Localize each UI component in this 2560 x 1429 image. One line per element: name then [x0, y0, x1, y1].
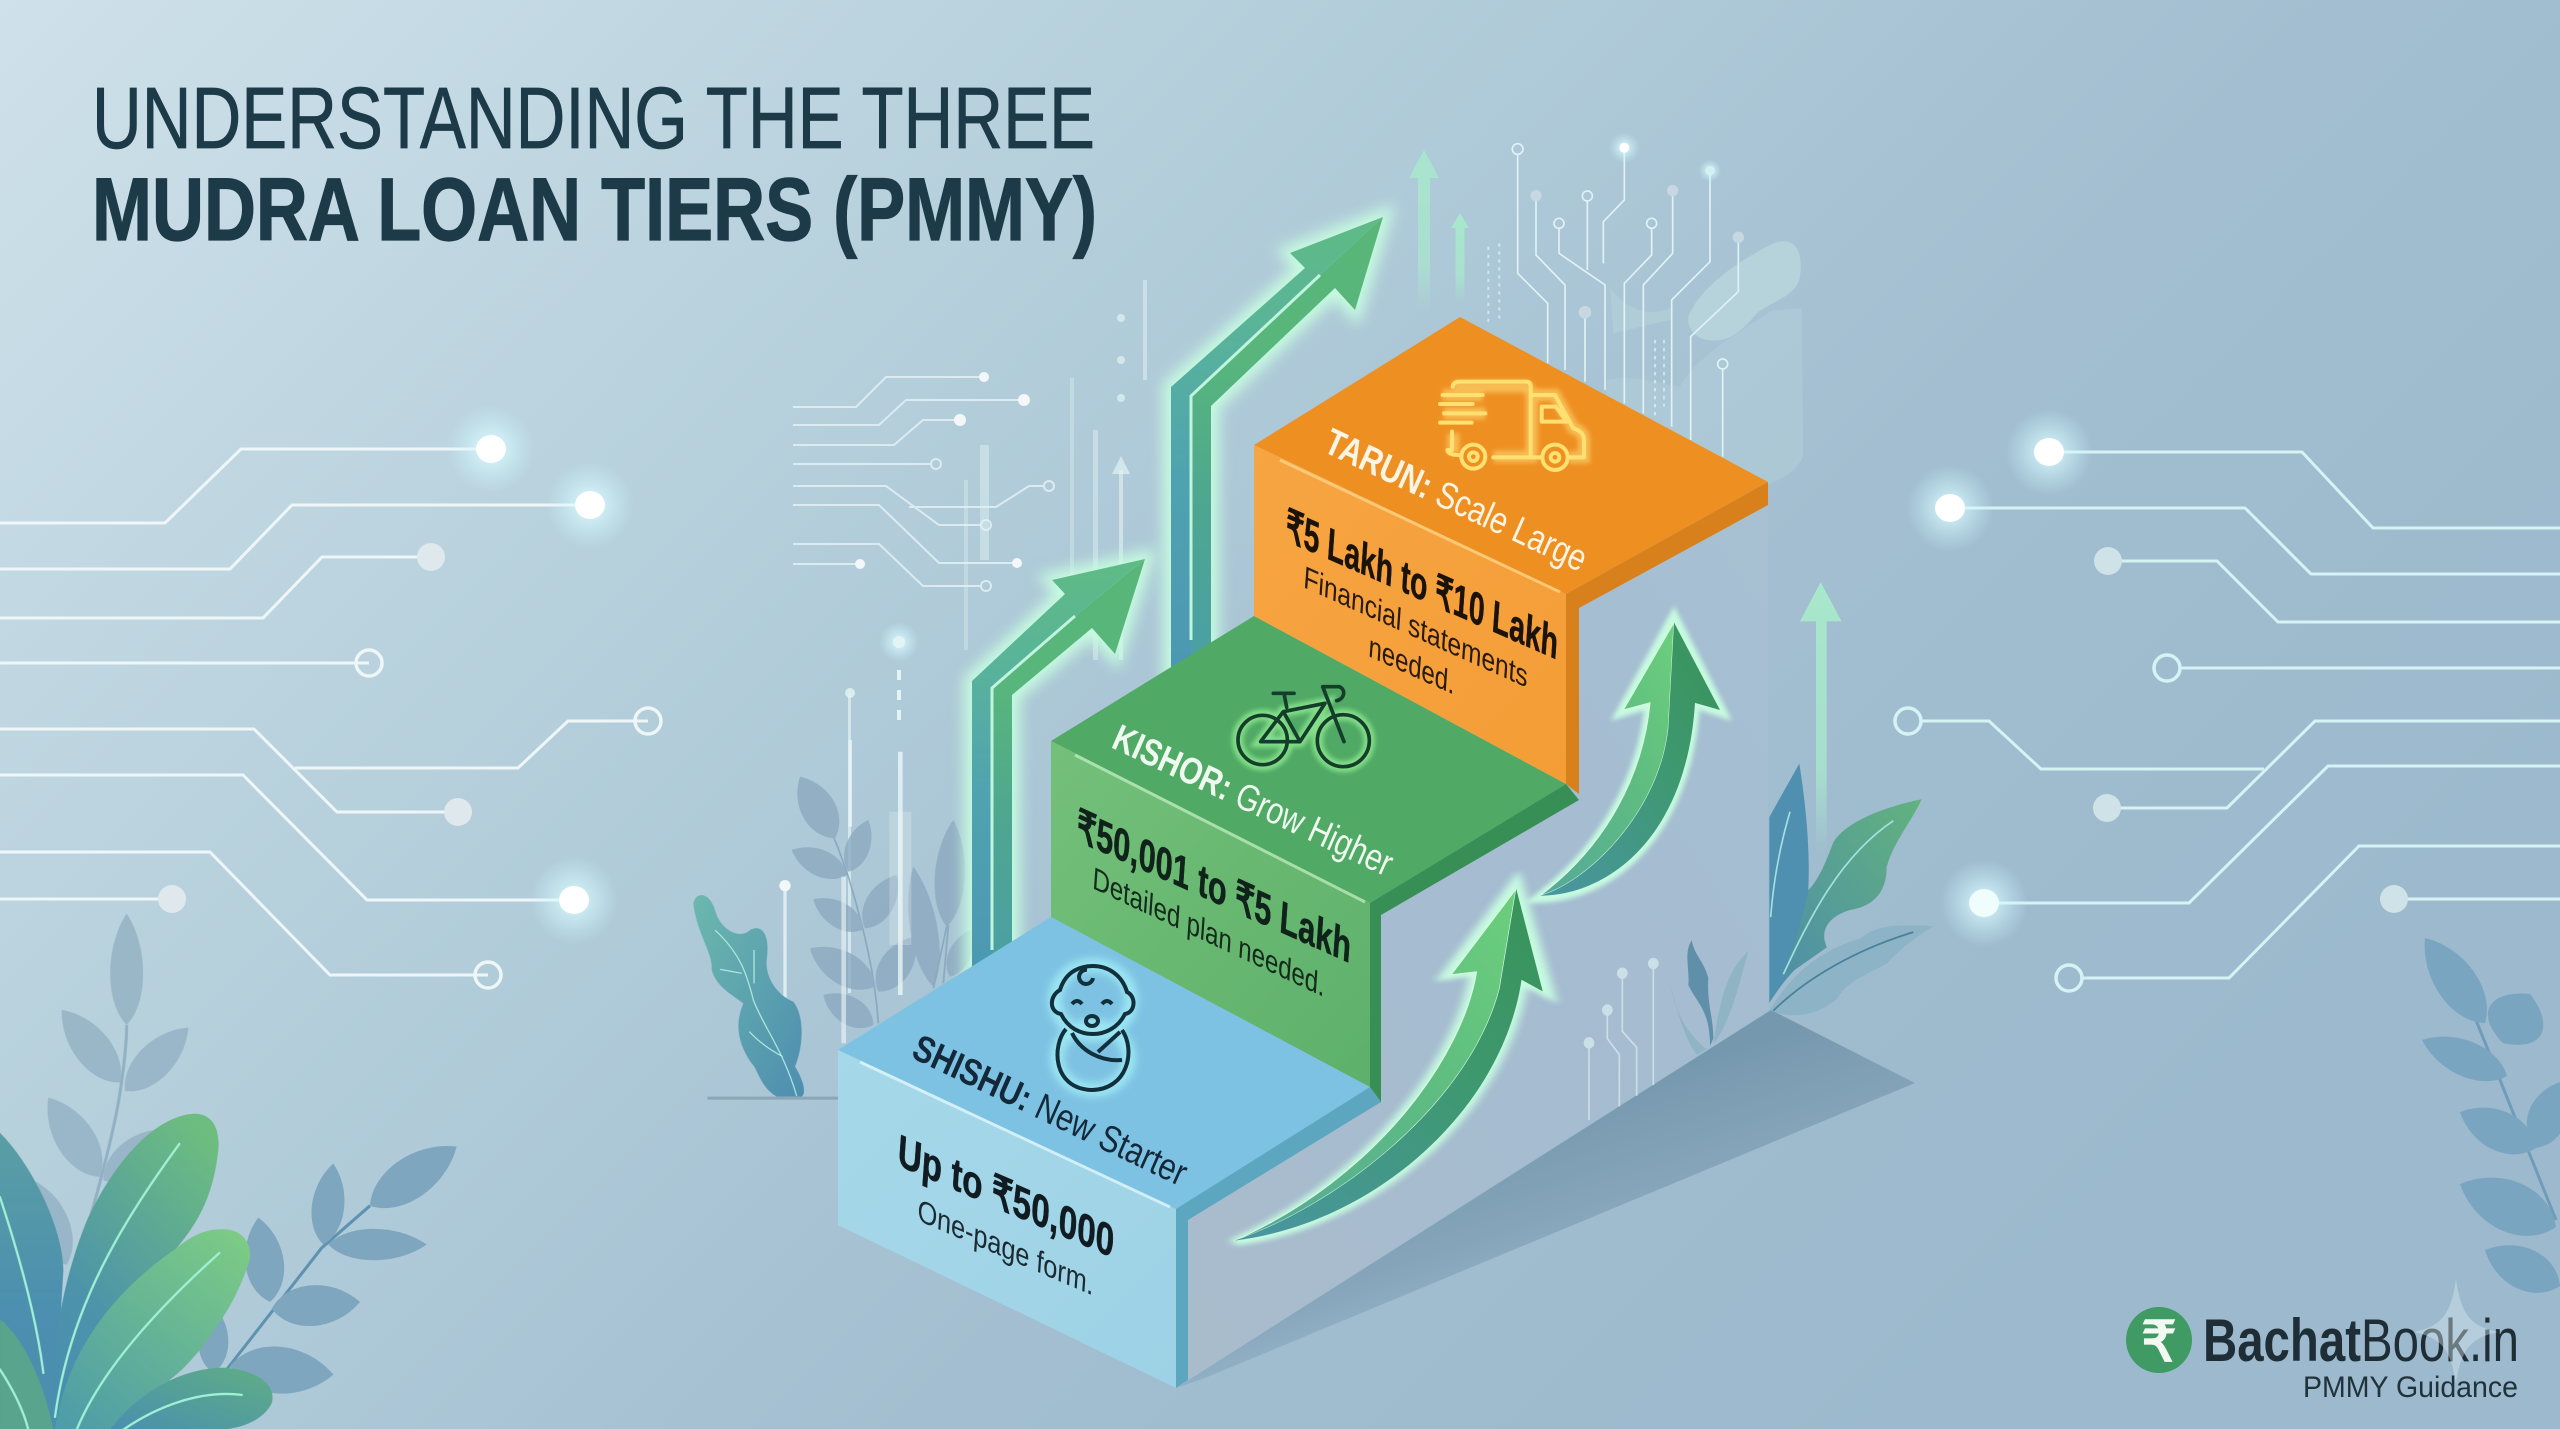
- vertical data lines: [845, 280, 1147, 993]
- text: shishu amount: Up to ₹50,000: [896, 1124, 1116, 1267]
- leaf veins: [0, 1144, 242, 1429]
- text: tarun requirement: Financial statements: [1303, 559, 1529, 694]
- text: shishu requirement: One-page form.: [917, 1192, 1095, 1302]
- bottom left foliage: [0, 914, 468, 1429]
- front face: [838, 1050, 1176, 1388]
- left circuit lines: [0, 405, 661, 988]
- translucent blobs: [1607, 241, 1803, 487]
- wall plants and traces: [1584, 940, 1748, 1120]
- blue leaf: [1769, 764, 1827, 1003]
- icon: baby: [1052, 965, 1134, 1090]
- text: kishor requirement: Detailed plan needed.: [1092, 860, 1326, 1004]
- text: kishor amount: ₹50,001 to ₹5 Lakh: [1075, 800, 1353, 974]
- lower curved arrow: [1234, 884, 1548, 1242]
- watermark sparkle: [2414, 1279, 2498, 1384]
- brand tagline: PMMY Guidance: [2303, 1371, 2518, 1404]
- brand name: BachatBook.in: [2203, 1307, 2519, 1374]
- mid plants left of stairs: [693, 740, 980, 1100]
- text: shishu label: SHISHU: New Starter: [906, 1027, 1193, 1195]
- mint arrow: [1800, 582, 1842, 853]
- mini circuit left of stairs: [793, 372, 1054, 591]
- ground shadow: [1176, 1010, 1915, 1388]
- pale leaf: [1770, 925, 1933, 1015]
- data dash columns: [1488, 243, 1664, 417]
- small up arrows behind top step: [1409, 150, 1469, 313]
- text: tarun requirement: needed.: [1368, 628, 1456, 701]
- big leaves: [0, 1130, 63, 1429]
- side edge: [1176, 1087, 1381, 1388]
- front growth arrow: [972, 559, 1145, 985]
- glowing vertical lights: [779, 740, 911, 1043]
- text: kishor label: KISHOR: Grow Higher: [1106, 717, 1399, 885]
- step 3 tarun block: [1254, 317, 1768, 794]
- icon: delivery truck: [1440, 382, 1584, 470]
- green leaf: [1783, 799, 1922, 978]
- right circuit lines: [1895, 408, 2560, 991]
- top right circuit: [1488, 132, 1803, 487]
- translucent sprig leaves: [785, 768, 980, 1037]
- rear growth arrow: [1171, 217, 1383, 680]
- step 1 shishu block: [838, 917, 1381, 1388]
- teal leaf: [693, 895, 804, 1097]
- circuit traces: [1512, 132, 1744, 457]
- title: UNDERSTANDING THE THREE: [92, 70, 1095, 167]
- title: MUDRA LOAN TIERS (PMMY): [92, 159, 1097, 259]
- icon: rupee badge: ₹: [2141, 1310, 2177, 1373]
- plants right of stairs: [1769, 582, 1933, 1015]
- top face: [838, 917, 1370, 1209]
- step 2 kishor block: [1051, 616, 1579, 1102]
- faded sprig: [16, 914, 200, 1272]
- blue sprig: [198, 1129, 468, 1398]
- text: tarun label: TARUN: Scale Large: [1318, 421, 1593, 580]
- text: tarun amount: ₹5 Lakh to ₹10 Lakh: [1284, 499, 1560, 669]
- title: [92, 70, 1097, 259]
- bottom right foliage: [2408, 926, 2560, 1305]
- icon: rupee badge: [2126, 1307, 2192, 1373]
- icon: bicycle: [1238, 687, 1369, 767]
- upper curved arrow: [1540, 617, 1722, 897]
- stair side wall: [1176, 505, 1768, 1388]
- logo: [2126, 1307, 2519, 1404]
- text: tarun requirement: [1303, 559, 1529, 701]
